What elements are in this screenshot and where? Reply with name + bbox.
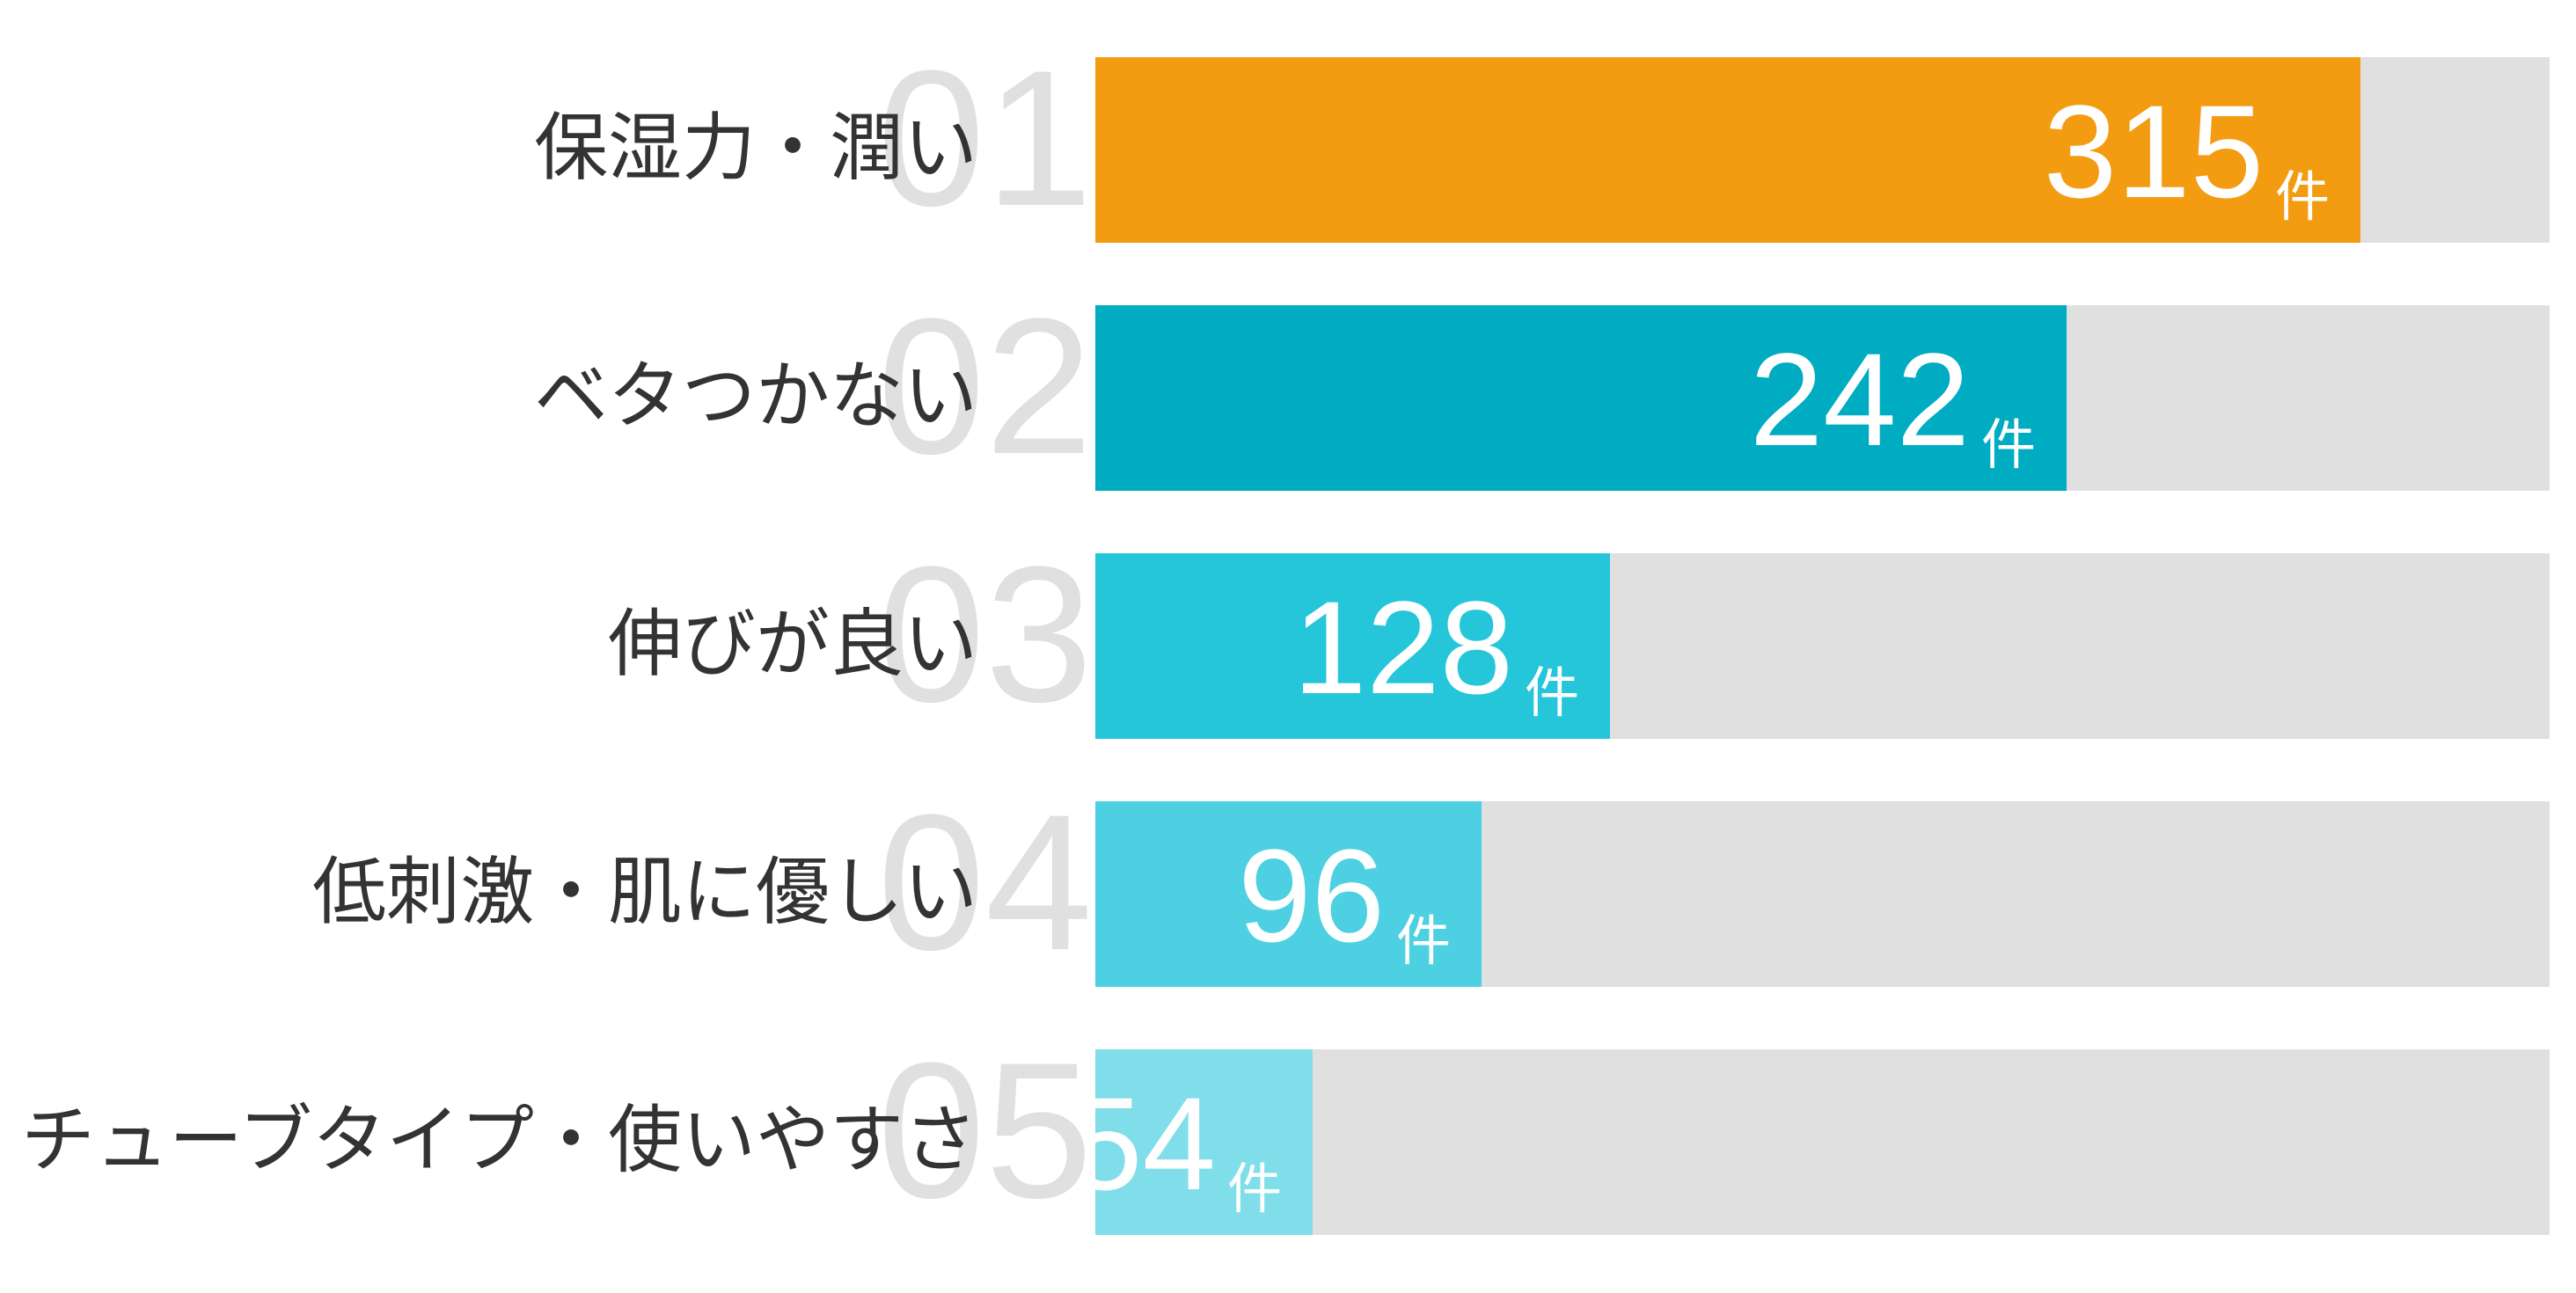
label: 伸びが良い: [608, 603, 977, 685]
bar: [1095, 801, 2550, 987]
rank number 04: 04: [877, 774, 1093, 990]
label: ベタつかない: [534, 354, 977, 437]
rank number 05: 05: [877, 1022, 1093, 1238]
label: 低刺激・肌に優しい: [312, 851, 977, 933]
row 4: [313, 801, 2550, 987]
bar: 96: [1238, 822, 1385, 969]
bar: 54: [1069, 1070, 1216, 1217]
row 3: [609, 553, 2550, 739]
rank number 02: 02: [877, 278, 1093, 494]
bar: [1069, 1049, 2550, 1235]
label: チューブタイプ・使いやすさ: [21, 1099, 977, 1181]
bar: 315: [2044, 77, 2264, 225]
bar: 128: [1293, 573, 1513, 721]
bar: [1095, 305, 2550, 491]
row 5: [27, 1049, 2550, 1235]
label: 保湿力・潤い: [534, 106, 977, 189]
bar: [1095, 553, 2550, 739]
bar: 件: [1396, 911, 1451, 972]
rank number 01: 01: [877, 30, 1093, 246]
row 1: [536, 57, 2550, 243]
bar: 件: [2275, 167, 2330, 228]
rank number 03: 03: [877, 526, 1093, 742]
bar: 件: [1525, 663, 1579, 724]
bar: 242: [1750, 325, 1970, 473]
row 2: [538, 305, 2550, 491]
bar: [1095, 57, 2550, 243]
bar: 件: [1227, 1159, 1282, 1220]
bar: 件: [1981, 415, 2036, 476]
